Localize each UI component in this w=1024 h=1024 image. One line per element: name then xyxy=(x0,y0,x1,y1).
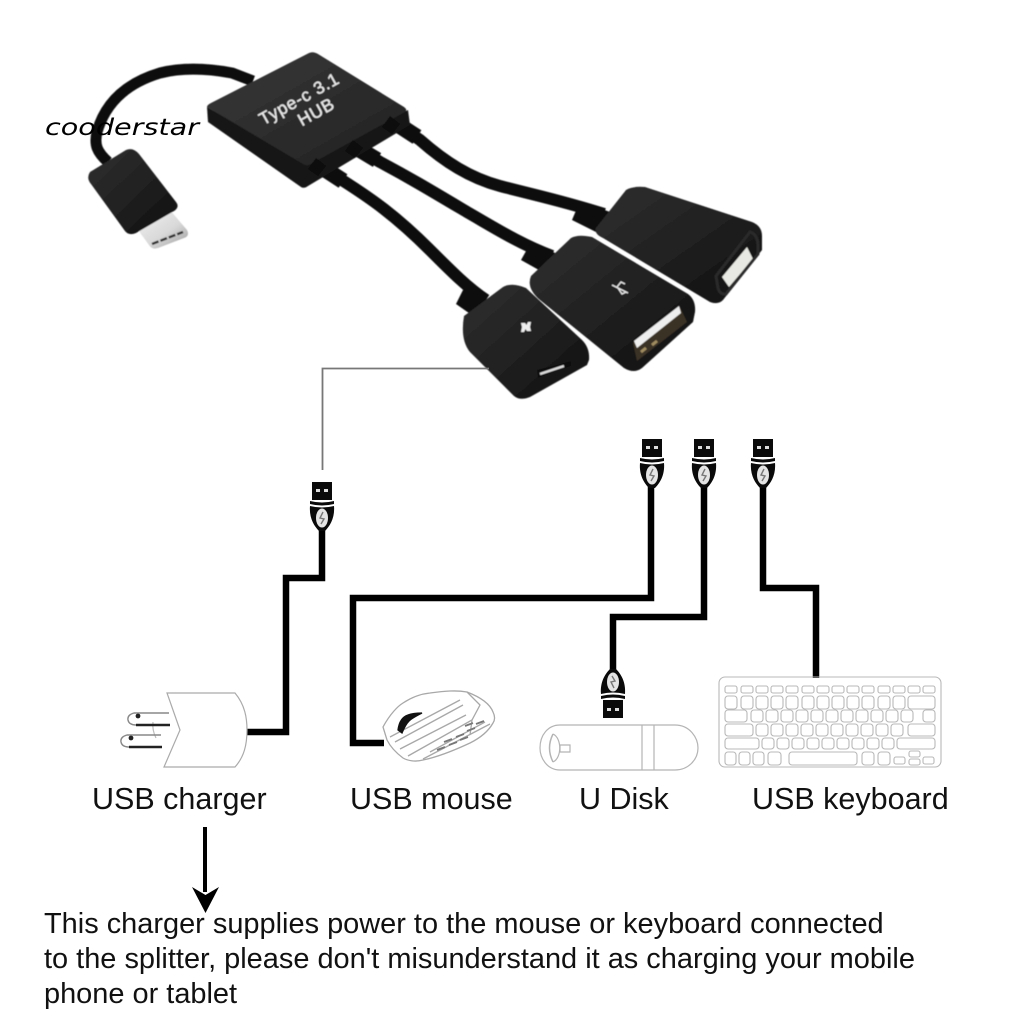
cable: Type-C lead xyxy=(96,69,253,162)
cable: to middle USB socket xyxy=(357,148,552,256)
icon: power bolt xyxy=(521,322,531,332)
top USB-A socket xyxy=(572,187,762,303)
cable: to micro USB socket xyxy=(323,168,486,300)
label: USB keyboard: USB keyboard xyxy=(752,782,949,816)
plug and cable: keyboard xyxy=(751,439,816,678)
middle USB-A socket xyxy=(521,236,695,371)
panel: U Disk xyxy=(540,439,716,816)
hub label: Type-c 3.1 xyxy=(255,69,343,129)
hub label: HUB xyxy=(294,94,338,130)
panel: USB charger xyxy=(92,482,334,816)
icon: mouse xyxy=(383,691,494,761)
panel: product photo of Type-C hub xyxy=(88,52,762,399)
plug and cable: mouse xyxy=(353,439,664,743)
micro USB power socket xyxy=(456,285,589,399)
icon: wall charger xyxy=(121,693,247,767)
watermark: cooderstar xyxy=(45,115,201,141)
panel: USB keyboard xyxy=(719,439,949,816)
Type-C connector xyxy=(88,149,188,249)
cable: to top USB socket xyxy=(397,124,604,214)
hub body xyxy=(207,52,410,188)
note about charger xyxy=(44,908,915,1010)
icon: USB symbol xyxy=(612,282,628,294)
label: USB charger: USB charger xyxy=(92,782,267,816)
cable collars xyxy=(323,124,417,181)
plug and cable: U disk xyxy=(601,439,716,718)
plug and cable: charger xyxy=(247,482,334,732)
note about charger: to the splitter, please don't misunderstand it as charging your mobile xyxy=(44,943,915,975)
arrow: from USB charger to note xyxy=(192,827,219,913)
panel: USB mouse xyxy=(350,439,664,816)
note about charger: This charger supplies power to the mouse or keyboard connected xyxy=(44,908,884,940)
icon: USB flash drive xyxy=(540,725,698,770)
label: U Disk: U Disk xyxy=(579,782,670,816)
thin connector line xyxy=(322,368,489,470)
icon: keyboard xyxy=(719,677,941,767)
note about charger: phone or tablet xyxy=(44,978,237,1010)
label: USB mouse: USB mouse xyxy=(350,782,513,816)
